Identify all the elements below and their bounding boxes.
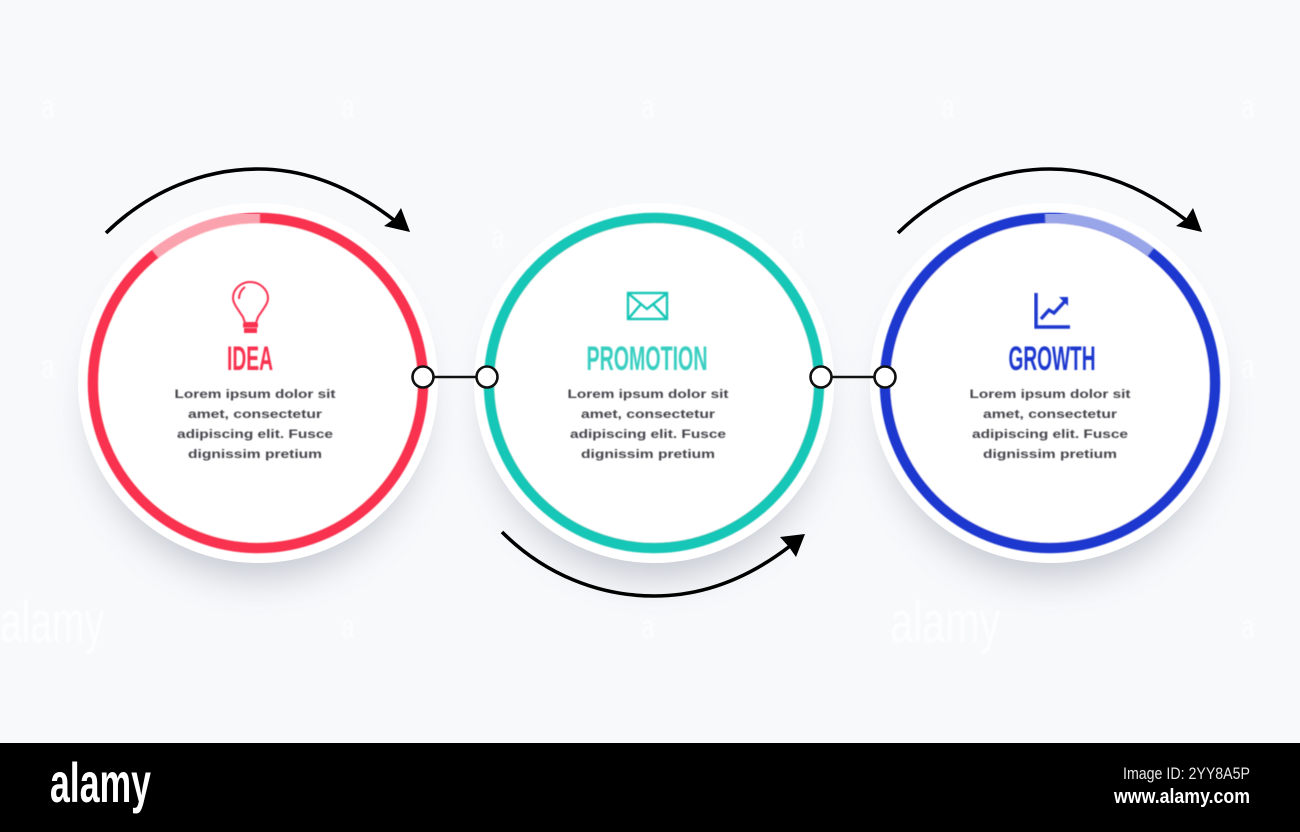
text: idea body [174,389,336,461]
background watermarks: a [342,88,355,126]
footer url: www.alamy.com [1113,786,1250,808]
ring watermarks [155,218,1151,254]
background watermarks: a [42,88,55,126]
heading: growth: GROWTH [1008,340,1096,378]
text: idea body: dignissim pretium [188,449,322,461]
icon: light bulb [233,282,268,332]
circle shadows [92,246,1216,578]
connector: promotion to growth [810,366,896,388]
text: growth body: adipiscing elit. Fusce [972,429,1128,441]
text: promotion body: dignissim pretium [581,449,715,461]
circle: growth ring [875,208,1225,558]
background watermarks: a [42,348,55,386]
background watermarks: a [642,88,655,126]
step 3: growth [875,208,1225,558]
background watermarks [0,88,1255,655]
text: idea body: amet, consectetur [188,409,323,421]
step 1: idea [83,208,433,558]
background watermarks: a [1242,608,1255,646]
text: growth body [970,389,1131,461]
footer image id: Image ID: 2YY8A5P [1123,764,1250,783]
footer band [0,743,1300,832]
text: promotion body [568,389,729,461]
background watermarks: a [642,608,655,646]
heading: idea: IDEA [227,340,273,378]
arrow: bottom middle [502,532,805,596]
background watermarks: a [492,218,505,256]
footer logo: alamy [50,751,151,814]
text: promotion body: amet, consectetur [581,409,716,421]
background watermarks: alamy [0,590,104,655]
connector: idea to promotion [412,366,498,388]
background watermarks: a [342,608,355,646]
circle: idea ring [83,208,433,558]
background watermarks: a [792,218,805,256]
icon: growth chart [1036,293,1070,327]
arrow: top left [106,169,410,233]
text: idea body: adipiscing elit. Fusce [177,429,333,441]
background watermarks: a [1242,348,1255,386]
heading: promotion: PROMOTION [586,340,708,378]
arrow: top right [898,169,1202,233]
text: idea body: Lorem ipsum dolor sit [174,389,336,401]
text: growth body: Lorem ipsum dolor sit [970,389,1131,401]
icon: envelope [628,293,667,319]
text: growth body: amet, consectetur [983,409,1118,421]
background watermarks: a [1242,88,1255,126]
text: promotion body: Lorem ipsum dolor sit [568,389,729,401]
circle: promotion ring [479,208,829,558]
text: growth body: dignissim pretium [983,449,1117,461]
background watermarks: alamy [890,590,1000,655]
text: promotion body: adipiscing elit. Fusce [570,429,726,441]
step 2: promotion [479,208,829,558]
background watermarks: a [942,88,955,126]
